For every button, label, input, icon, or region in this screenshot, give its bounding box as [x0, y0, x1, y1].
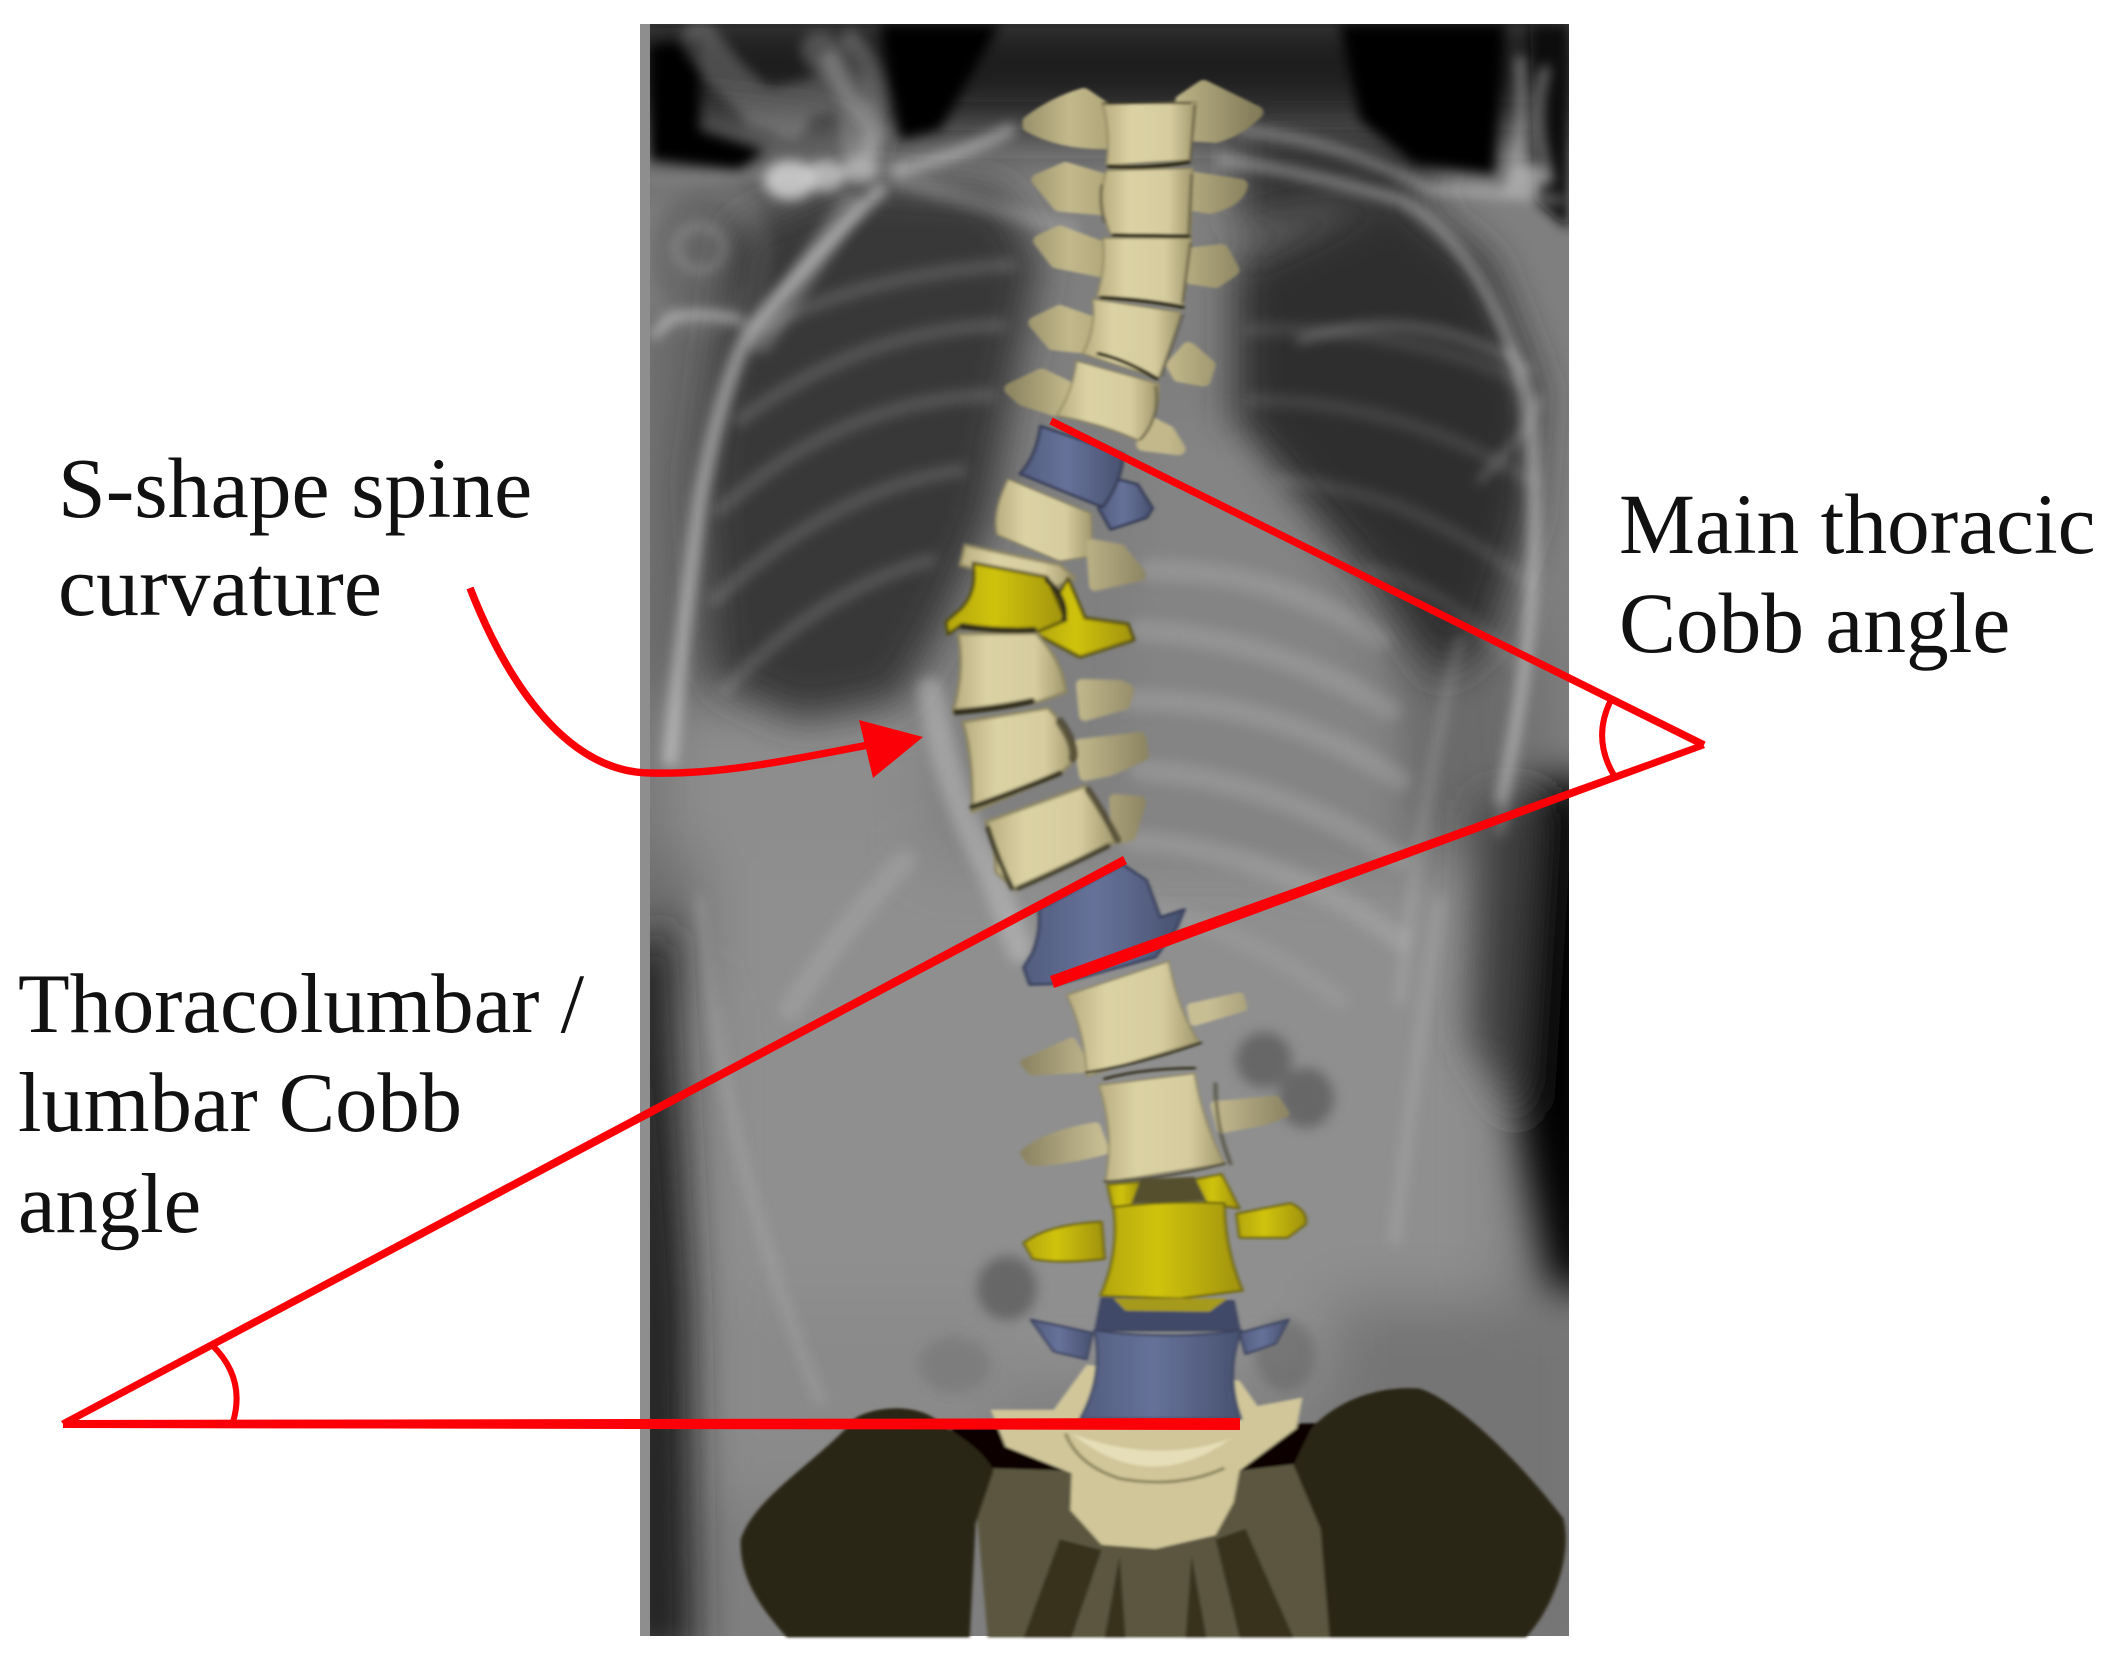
vertebral bodies: [996, 102, 1196, 561]
bright clavicle head: [764, 156, 878, 200]
left and right body edges: [620, 780, 1600, 1658]
sacrum highlight: [1072, 1434, 1231, 1467]
label: main thoracic Cobb angle: Cobb angle: [1619, 577, 2010, 671]
panel: chest and abdomen x-ray: [600, 0, 1600, 1658]
yellow thoracic vertebra: [946, 563, 1134, 657]
yellow lumbar vertebra: [1024, 1174, 1306, 1299]
label: S-shape spine curvature: curvature: [58, 539, 382, 634]
upper endplate line: [1051, 421, 1704, 745]
arrow: S-shape curvature pointer: [470, 588, 923, 778]
lower endplate line: [63, 1418, 1240, 1430]
label: thoracolumbar lumbar Cobb angle: Thoracolumbar /: [18, 958, 584, 1051]
large soft tonal regions: [650, 24, 1569, 1636]
lower sacrum and ilium: [973, 1460, 1329, 1637]
bowel gas shadows: [919, 1032, 1334, 1393]
annotation: main thoracic Cobb angle lines: [1050, 421, 1705, 988]
left iliac wing: [741, 1408, 994, 1637]
label: thoracolumbar lumbar Cobb angle: angle: [18, 1158, 201, 1251]
angle arc: [1602, 702, 1615, 777]
transverse processes left: [1012, 94, 1105, 410]
yellow lower rim: [1114, 1299, 1228, 1312]
annotation: thoracolumbar lumbar Cobb angle lines: [61, 856, 1240, 1430]
right iliac wing: [1293, 1388, 1566, 1637]
right processes: [1080, 545, 1143, 838]
label: S-shape spine curvature: S-shape spine: [58, 441, 532, 536]
blue thoracic vertebra: [1020, 426, 1153, 529]
blue vertebra at the thoracolumbar junction: [1024, 864, 1184, 985]
lung fields: [700, 130, 1540, 720]
spine: mid thoracic vertebrae: [946, 545, 1143, 890]
vertebral bodies: [1067, 961, 1225, 1182]
rib band patterns: [700, 265, 1530, 1400]
transverse processes: [1025, 997, 1284, 1161]
dark disc lines: [1087, 1043, 1231, 1182]
lumbar gap: [1132, 1177, 1207, 1203]
dark disc lines: [1099, 103, 1195, 439]
label: thoracolumbar lumbar Cobb angle: lumbar Cobb: [18, 1057, 462, 1150]
label: main thoracic Cobb angle: Main thoracic: [1619, 478, 2096, 572]
upper sacrum: [991, 1365, 1302, 1549]
pelvis: [741, 1365, 1566, 1637]
x-ray base: [640, 24, 1569, 1636]
angle arc: [212, 1345, 237, 1422]
dark disc lines: [956, 580, 1118, 888]
spine: lumbar vertebrae: [1024, 864, 1306, 1419]
mediastinum brightening: [1211, 425, 1398, 824]
vertebral bodies below yellow: [953, 633, 1115, 890]
left edge strip: [640, 24, 650, 1636]
transverse processes right: [1144, 86, 1256, 449]
spine: upper thoracic vertebrae: [996, 86, 1256, 561]
dark upper corners: [650, 24, 1569, 230]
body above yellow: [960, 545, 1075, 590]
upper endplate line: [61, 856, 1127, 1427]
lower endplate line: [1050, 742, 1705, 988]
black shadow behind pelvis: [952, 1423, 1347, 1518]
shoulder bones and ribs: [638, 40, 1560, 830]
sacral foramina shadows: [1024, 1529, 1293, 1637]
blue lumbar vertebra: [1031, 1299, 1289, 1419]
